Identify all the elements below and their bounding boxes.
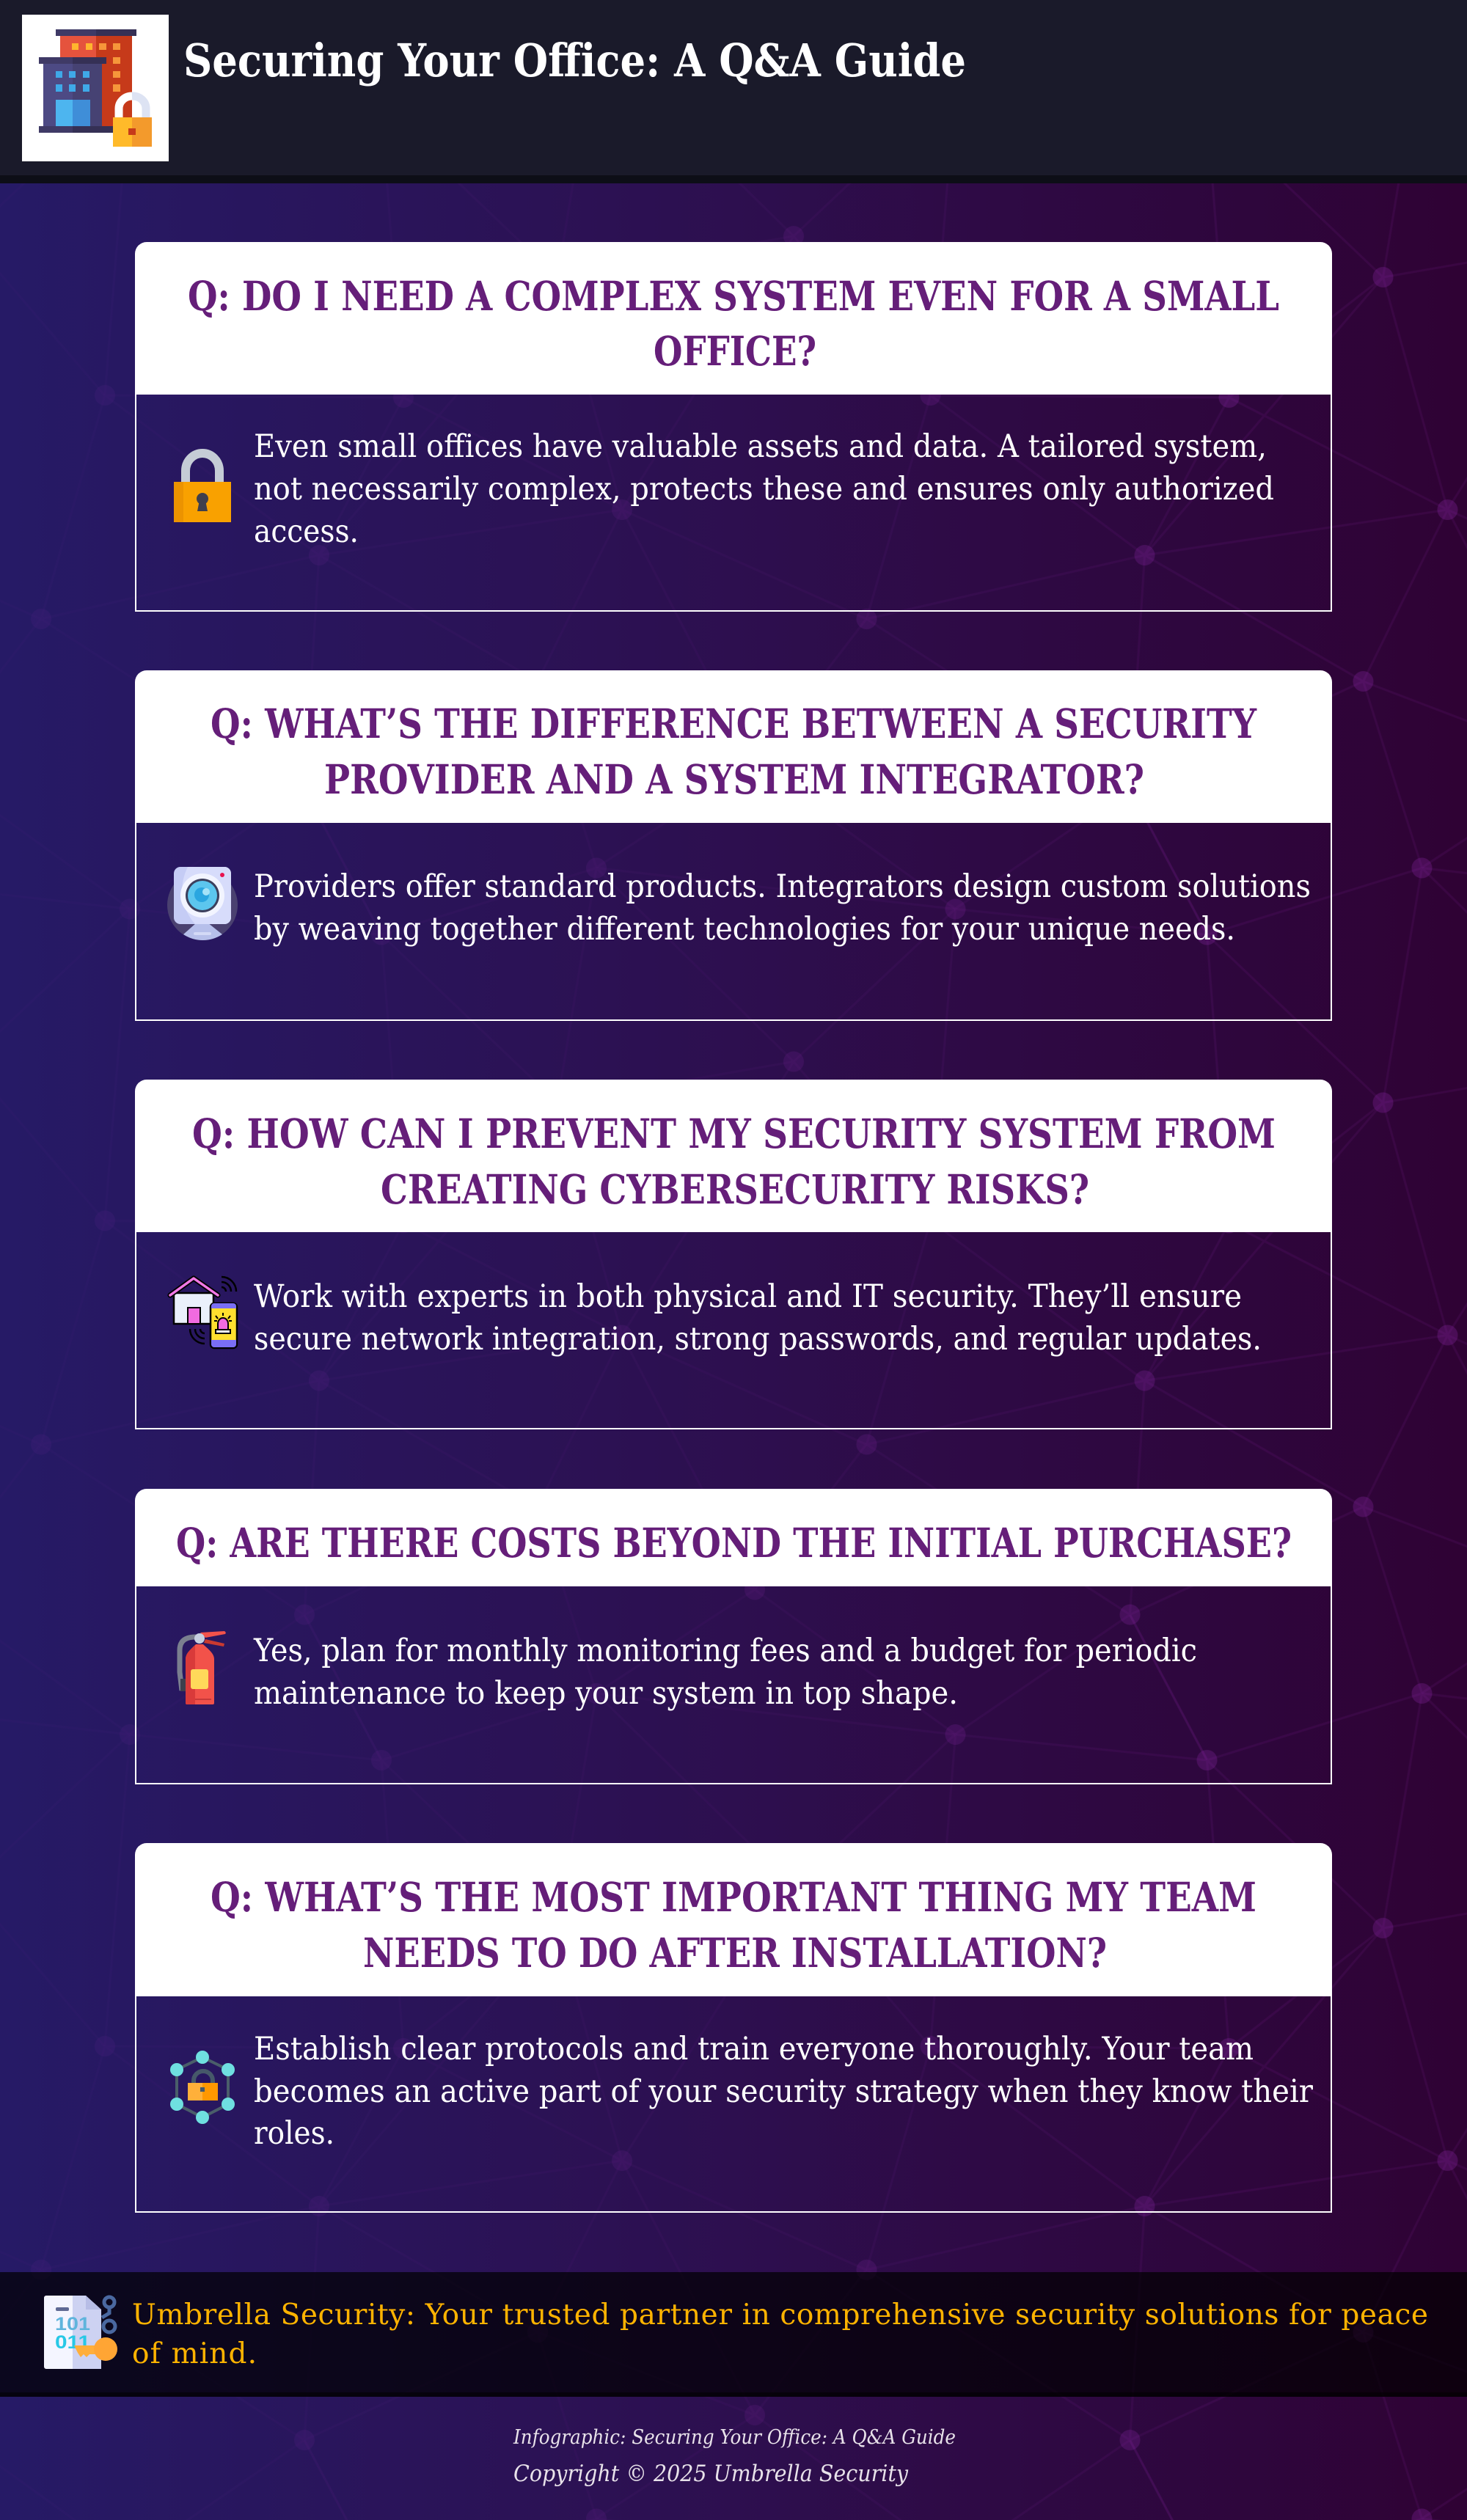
panel: Q&A card 1 [135, 242, 1332, 611]
answer text 5 [254, 2031, 1313, 2152]
answer box 5 [136, 1996, 1331, 2212]
tagline band [0, 2272, 1467, 2397]
icon: encrypted file with key [44, 2296, 117, 2369]
answer box 1 [136, 394, 1331, 611]
panel: Q&A card 4 [135, 1489, 1332, 1784]
question header 3: CREATING CYBERSECURITY RISKS? [381, 1165, 1089, 1213]
icon: fire extinguisher [180, 1631, 226, 1704]
question header 5 [135, 1843, 1332, 1996]
footer credits: Copyright © 2025 Umbrella Security [513, 2461, 908, 2487]
question header 5: Q: WHAT’S THE MOST IMPORTANT THING MY TEAM [211, 1873, 1256, 1921]
answer text 2: Providers offer standard products. Integrators design custom solutions [254, 868, 1311, 905]
question header 5: NEEDS TO DO AFTER INSTALLATION? [363, 1929, 1107, 1977]
question header 1: OFFICE? [654, 327, 816, 375]
answer box 3 [136, 1231, 1331, 1429]
question header 3: Q: HOW CAN I PREVENT MY SECURITY SYSTEM FROM [192, 1110, 1276, 1157]
question header 2: Q: WHAT’S THE DIFFERENCE BETWEEN A SECURITY [211, 700, 1257, 747]
tagline text: of mind. [132, 2337, 257, 2370]
icon: security camera [167, 867, 238, 940]
answer text 4: Yes, plan for monthly monitoring fees and a budget for periodic [253, 1633, 1197, 1669]
tagline text [132, 2299, 1428, 2370]
icon: office building with padlock logo [22, 15, 169, 161]
question header 3 [135, 1080, 1332, 1231]
question header 4: Q: ARE THERE COSTS BEYOND THE INITIAL PURCHASE? [176, 1519, 1292, 1567]
answer text 1: Even small offices have valuable assets and data. A tailored system, [254, 428, 1267, 465]
header bar [0, 0, 1467, 183]
icon: encrypted file with key: 011 [55, 2332, 90, 2353]
answer text 2: by weaving together different technologies for your unique needs. [254, 911, 1235, 948]
title: Securing Your Office: A Q&A Guide [183, 34, 966, 87]
question header 1 [135, 242, 1332, 395]
tagline text: Umbrella Security: Your trusted partner in comprehensive security solutions for peace [132, 2299, 1428, 2332]
answer text 5: roles. [254, 2115, 334, 2152]
answer text 1 [254, 428, 1274, 550]
icon: smart home alarm [170, 1277, 237, 1348]
answer text 3 [254, 1278, 1262, 1358]
answer text 3: secure network integration, strong passwords, and regular updates. [254, 1321, 1262, 1358]
question header 4 [135, 1489, 1332, 1586]
icon: network padlock [170, 2051, 235, 2124]
footer credits: Infographic: Securing Your Office: A Q&A Guide [513, 2426, 956, 2449]
answer text 1: access. [254, 513, 359, 550]
question header 2: PROVIDER AND A SYSTEM INTEGRATOR? [324, 755, 1144, 803]
icon: encrypted file with key: 101 [55, 2314, 90, 2334]
answer box 2 [136, 822, 1331, 1020]
panel: Q&A card 3 [135, 1080, 1332, 1429]
answer text 1: not necessarily complex, protects these and ensures only authorized [254, 471, 1274, 508]
panel: Q&A card 2 [135, 670, 1332, 1020]
answer text 2 [254, 868, 1311, 948]
answer text 5: becomes an active part of your security strategy when they know their [254, 2073, 1313, 2110]
question header 2 [135, 670, 1332, 822]
answer text 3: Work with experts in both physical and IT security. They’ll ensure [254, 1278, 1242, 1315]
footer credits [513, 2426, 956, 2487]
icon: padlock [174, 453, 231, 522]
answer text 5: Establish clear protocols and train everyone thoroughly. Your team [254, 2031, 1254, 2067]
question header 1: Q: DO I NEED A COMPLEX SYSTEM EVEN FOR A SMALL [188, 272, 1279, 320]
answer text 4: maintenance to keep your system in top shape. [254, 1675, 958, 1712]
panel: Q&A card 5 [135, 1843, 1332, 2212]
answer text 4 [253, 1633, 1197, 1712]
answer box 4 [136, 1586, 1331, 1784]
